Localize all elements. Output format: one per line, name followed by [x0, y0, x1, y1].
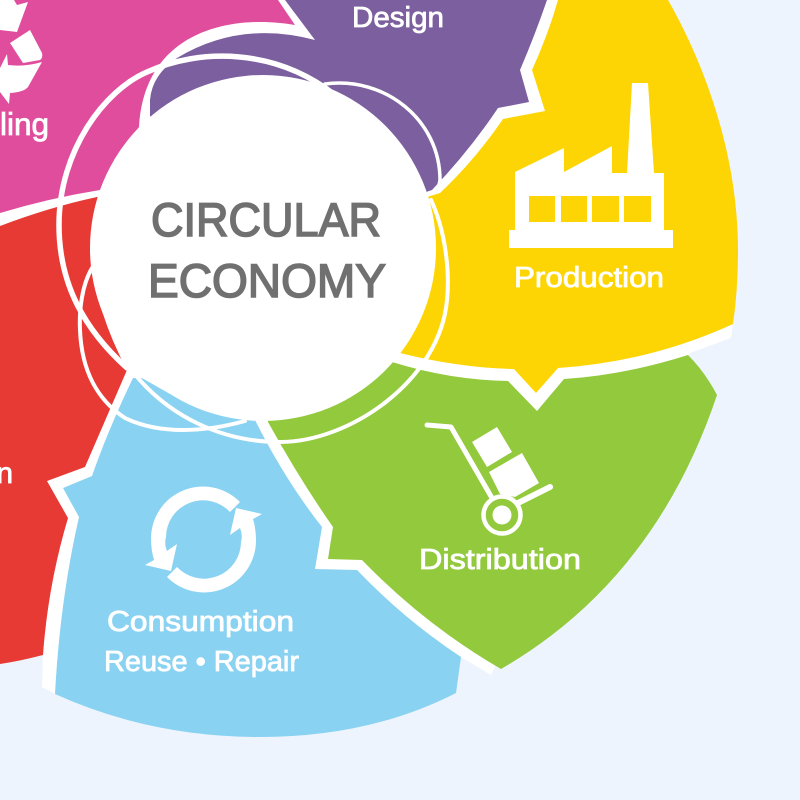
orbit rings — [59, 56, 448, 442]
icon: factory — [509, 83, 673, 248]
title: circular economy: CIRCULAR — [151, 193, 381, 246]
panel: recycling — [0, 0, 295, 213]
label: consumption: Consumption — [107, 606, 294, 638]
label: production: Production — [514, 262, 664, 294]
icon: recycling arrows — [0, 0, 42, 104]
panel: production — [263, 0, 738, 393]
label: design: Design — [352, 2, 444, 34]
panel: design — [150, 0, 547, 248]
panel: distribution — [263, 248, 717, 669]
label: reuse and repair: Reuse • Repair — [104, 646, 299, 678]
panel: consumption — [55, 378, 461, 737]
icon: cycle arrows — [145, 487, 262, 592]
title: circular economy: ECONOMY — [148, 254, 386, 307]
panel: collection — [0, 197, 263, 664]
label: distribution: Distribution — [419, 544, 581, 576]
icon: hand truck — [427, 425, 550, 534]
center circle — [90, 75, 436, 421]
title: circular economy — [148, 193, 386, 307]
